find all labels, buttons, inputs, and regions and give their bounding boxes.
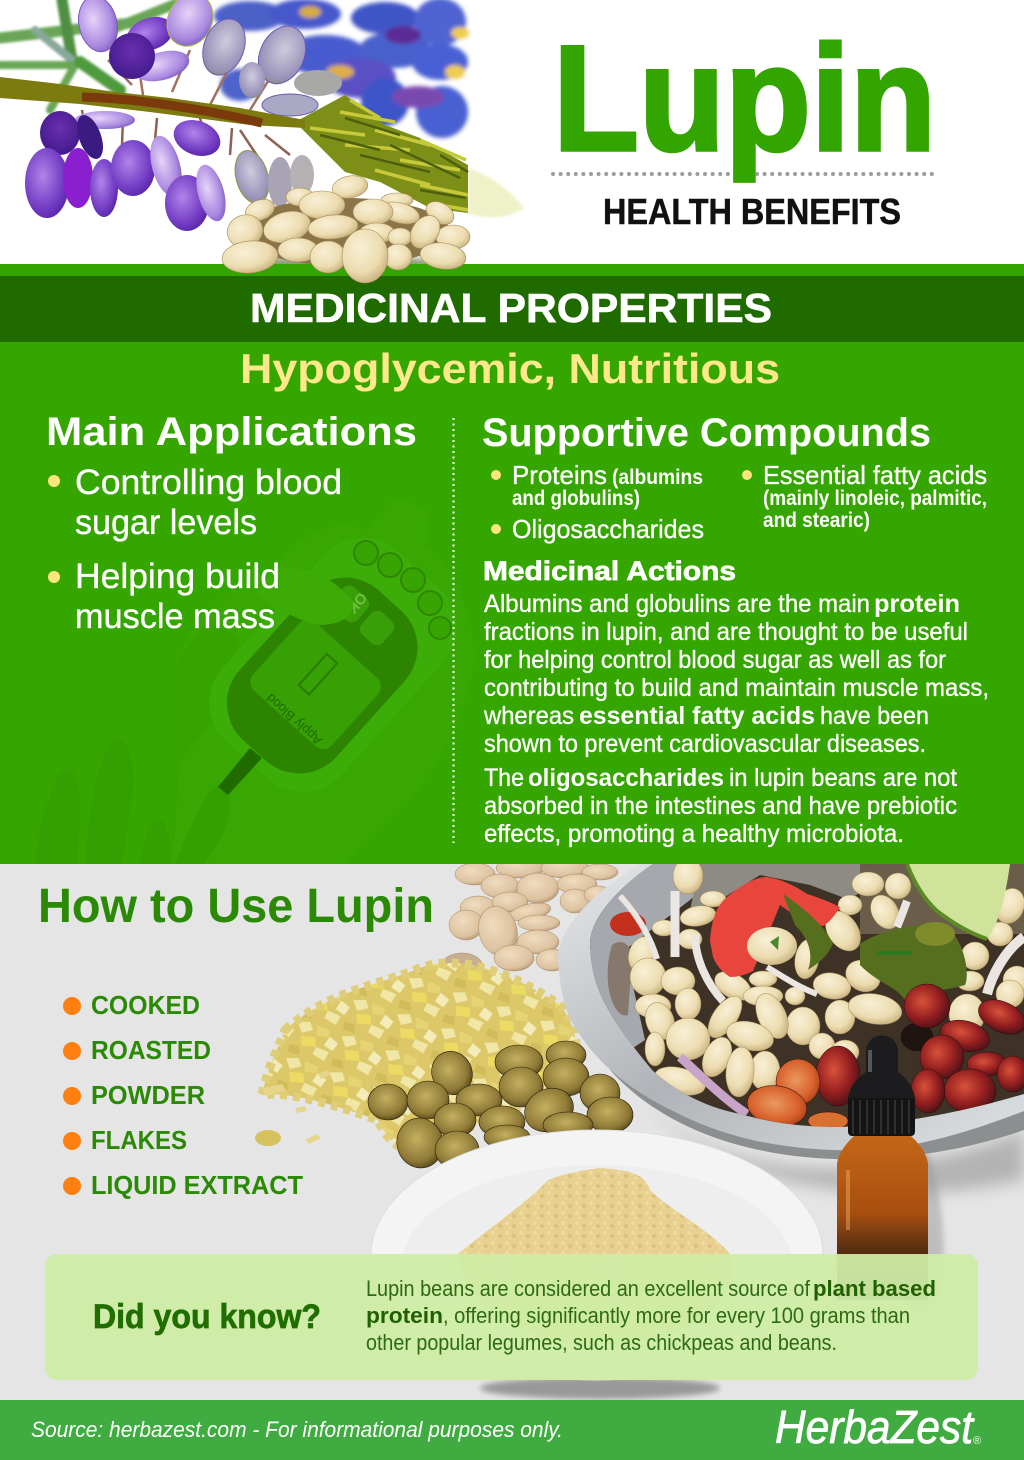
test strip (218, 748, 262, 795)
bean shadow (225, 256, 465, 280)
logo: HerbaZest: HerbaZest (775, 1401, 975, 1453)
image: lupin flakes (255, 963, 577, 1150)
list: supportive compounds: Essential fatty acids (763, 460, 987, 490)
image: plate with lupin powder (371, 1130, 823, 1380)
text block: medicinal actions: shown to prevent cardiovascular diseases. (484, 730, 926, 758)
text block: medicinal actions: in lupin beans are not (729, 764, 957, 792)
image: tarwi seeds (368, 1041, 633, 1172)
list: main applications (48, 463, 342, 636)
list: forms of use: FLAKES (91, 1125, 187, 1155)
image: hand holding blood glucose meter (218, 540, 452, 795)
footer (0, 1400, 1024, 1460)
herb dressing (783, 894, 967, 1000)
lower flower petals (25, 110, 314, 231)
dotted divider (553, 172, 938, 176)
tomato (710, 877, 840, 977)
upper flower petals (74, 0, 342, 120)
onion slices (620, 891, 1024, 1114)
panel: how to use (0, 858, 1024, 1400)
callout: did you know (45, 1254, 978, 1380)
title: Lupin: Lupin (553, 14, 936, 182)
heading: how to use lupin: How to Use Lupin (38, 880, 434, 933)
logo: HerbaZest: ® (973, 1435, 981, 1447)
meter buttons (354, 541, 451, 639)
top green band (0, 264, 1024, 276)
image: hand holding blood glucose meter: Apply Blood (263, 691, 325, 748)
list: supportive compounds: Oligosaccharides (512, 514, 704, 544)
text block: medicinal actions: effects, promoting a healthy microbiota. (484, 820, 904, 848)
text block: medicinal actions: Albumins and globulins are the main (484, 590, 870, 618)
subtitle: HEALTH BENEFITS (603, 191, 901, 232)
list: main applications: muscle mass (75, 597, 275, 636)
beans in bowl (624, 858, 1024, 1100)
heading: supportive compounds: Supportive Compounds (482, 411, 931, 455)
text block: medicinal actions (483, 590, 989, 848)
callout text: protein (366, 1303, 443, 1328)
list: supportive compounds: and stearic) (763, 509, 870, 532)
callout text: other popular legumes, such as chickpeas and beans. (366, 1330, 837, 1355)
meter body (210, 578, 418, 774)
green bud spike (295, 95, 524, 217)
text block: medicinal actions: essential fatty acids (579, 702, 815, 730)
thumb (290, 580, 354, 625)
text block: medicinal actions: fractions in lupin, and are thought to be useful (484, 618, 968, 646)
blurred green leaves (0, 0, 175, 110)
stem (0, 77, 305, 128)
text block: medicinal actions: oligosaccharides (528, 764, 724, 792)
dark green heading band (0, 276, 1024, 342)
plate shadow (480, 1377, 720, 1399)
heading: main applications: Main Applications (46, 410, 417, 454)
blurred blue flowers (214, 0, 469, 138)
list: main applications: Helping build (75, 557, 280, 596)
source note: Source: herbazest.com - For informational purposes only. (31, 1417, 563, 1442)
list: main applications: Controlling blood (75, 463, 342, 502)
list: supportive compounds: Proteins (512, 460, 607, 490)
bowl wall and spoon (590, 864, 700, 1048)
header background (0, 0, 1024, 264)
text block: medicinal actions: for helping control blood sugar as well as for (484, 646, 946, 674)
list: forms of use: COOKED (91, 990, 200, 1020)
heading: medicinal properties: MEDICINAL PROPERTIES (250, 285, 772, 331)
list: main applications: sugar levels (75, 503, 257, 542)
callout text: plant based (813, 1276, 936, 1301)
heading: medicinal actions: Medicinal Actions (483, 556, 736, 586)
text block: medicinal actions: absorbed in the intestines and have prebiotic (484, 792, 957, 820)
panel: medicinal properties (0, 342, 1024, 864)
bowl shadow (672, 1126, 1024, 1200)
illustration: lupin flowers and beans (0, 0, 524, 280)
text block: medicinal actions: contributing to build and maintain muscle mass, (484, 674, 989, 702)
list: forms of use: POWDER (91, 1080, 205, 1110)
pile of lupin beans (221, 173, 470, 283)
callout text (366, 1276, 936, 1355)
list: supportive compounds: and globulins) (512, 487, 640, 510)
text block: medicinal actions: whereas (483, 702, 574, 730)
text block: medicinal actions: protein (874, 590, 960, 618)
list: forms of use: LIQUID EXTRACT (91, 1170, 303, 1200)
list: supportive compounds (491, 460, 987, 544)
list: forms of use: ROASTED (91, 1035, 211, 1065)
list: supportive compounds: (albumins (612, 466, 703, 489)
callout text: , offering significantly more for every 100 grams than (443, 1303, 910, 1328)
text block: medicinal actions: The (484, 764, 524, 792)
column divider (452, 418, 454, 843)
image: dropper bottle (837, 1036, 944, 1310)
roasted corn kernels (744, 984, 1024, 1131)
image: raw tan lupin beans (444, 864, 618, 972)
list: forms of use (63, 990, 303, 1200)
list: supportive compounds: (mainly linoleic, palmitic, (763, 487, 987, 510)
text block: medicinal actions: have been (820, 702, 929, 730)
callout text: Lupin beans are considered an excellent source of (366, 1276, 811, 1301)
subheading: hypoglycemic, nutritious: Hypoglycemic, Nutritious (240, 345, 780, 392)
image: bowl of lupin salad (558, 858, 1024, 1159)
lime wedge (907, 864, 1010, 939)
callout heading: Did you know? (93, 1298, 321, 1336)
meter labels: OK (343, 589, 370, 617)
